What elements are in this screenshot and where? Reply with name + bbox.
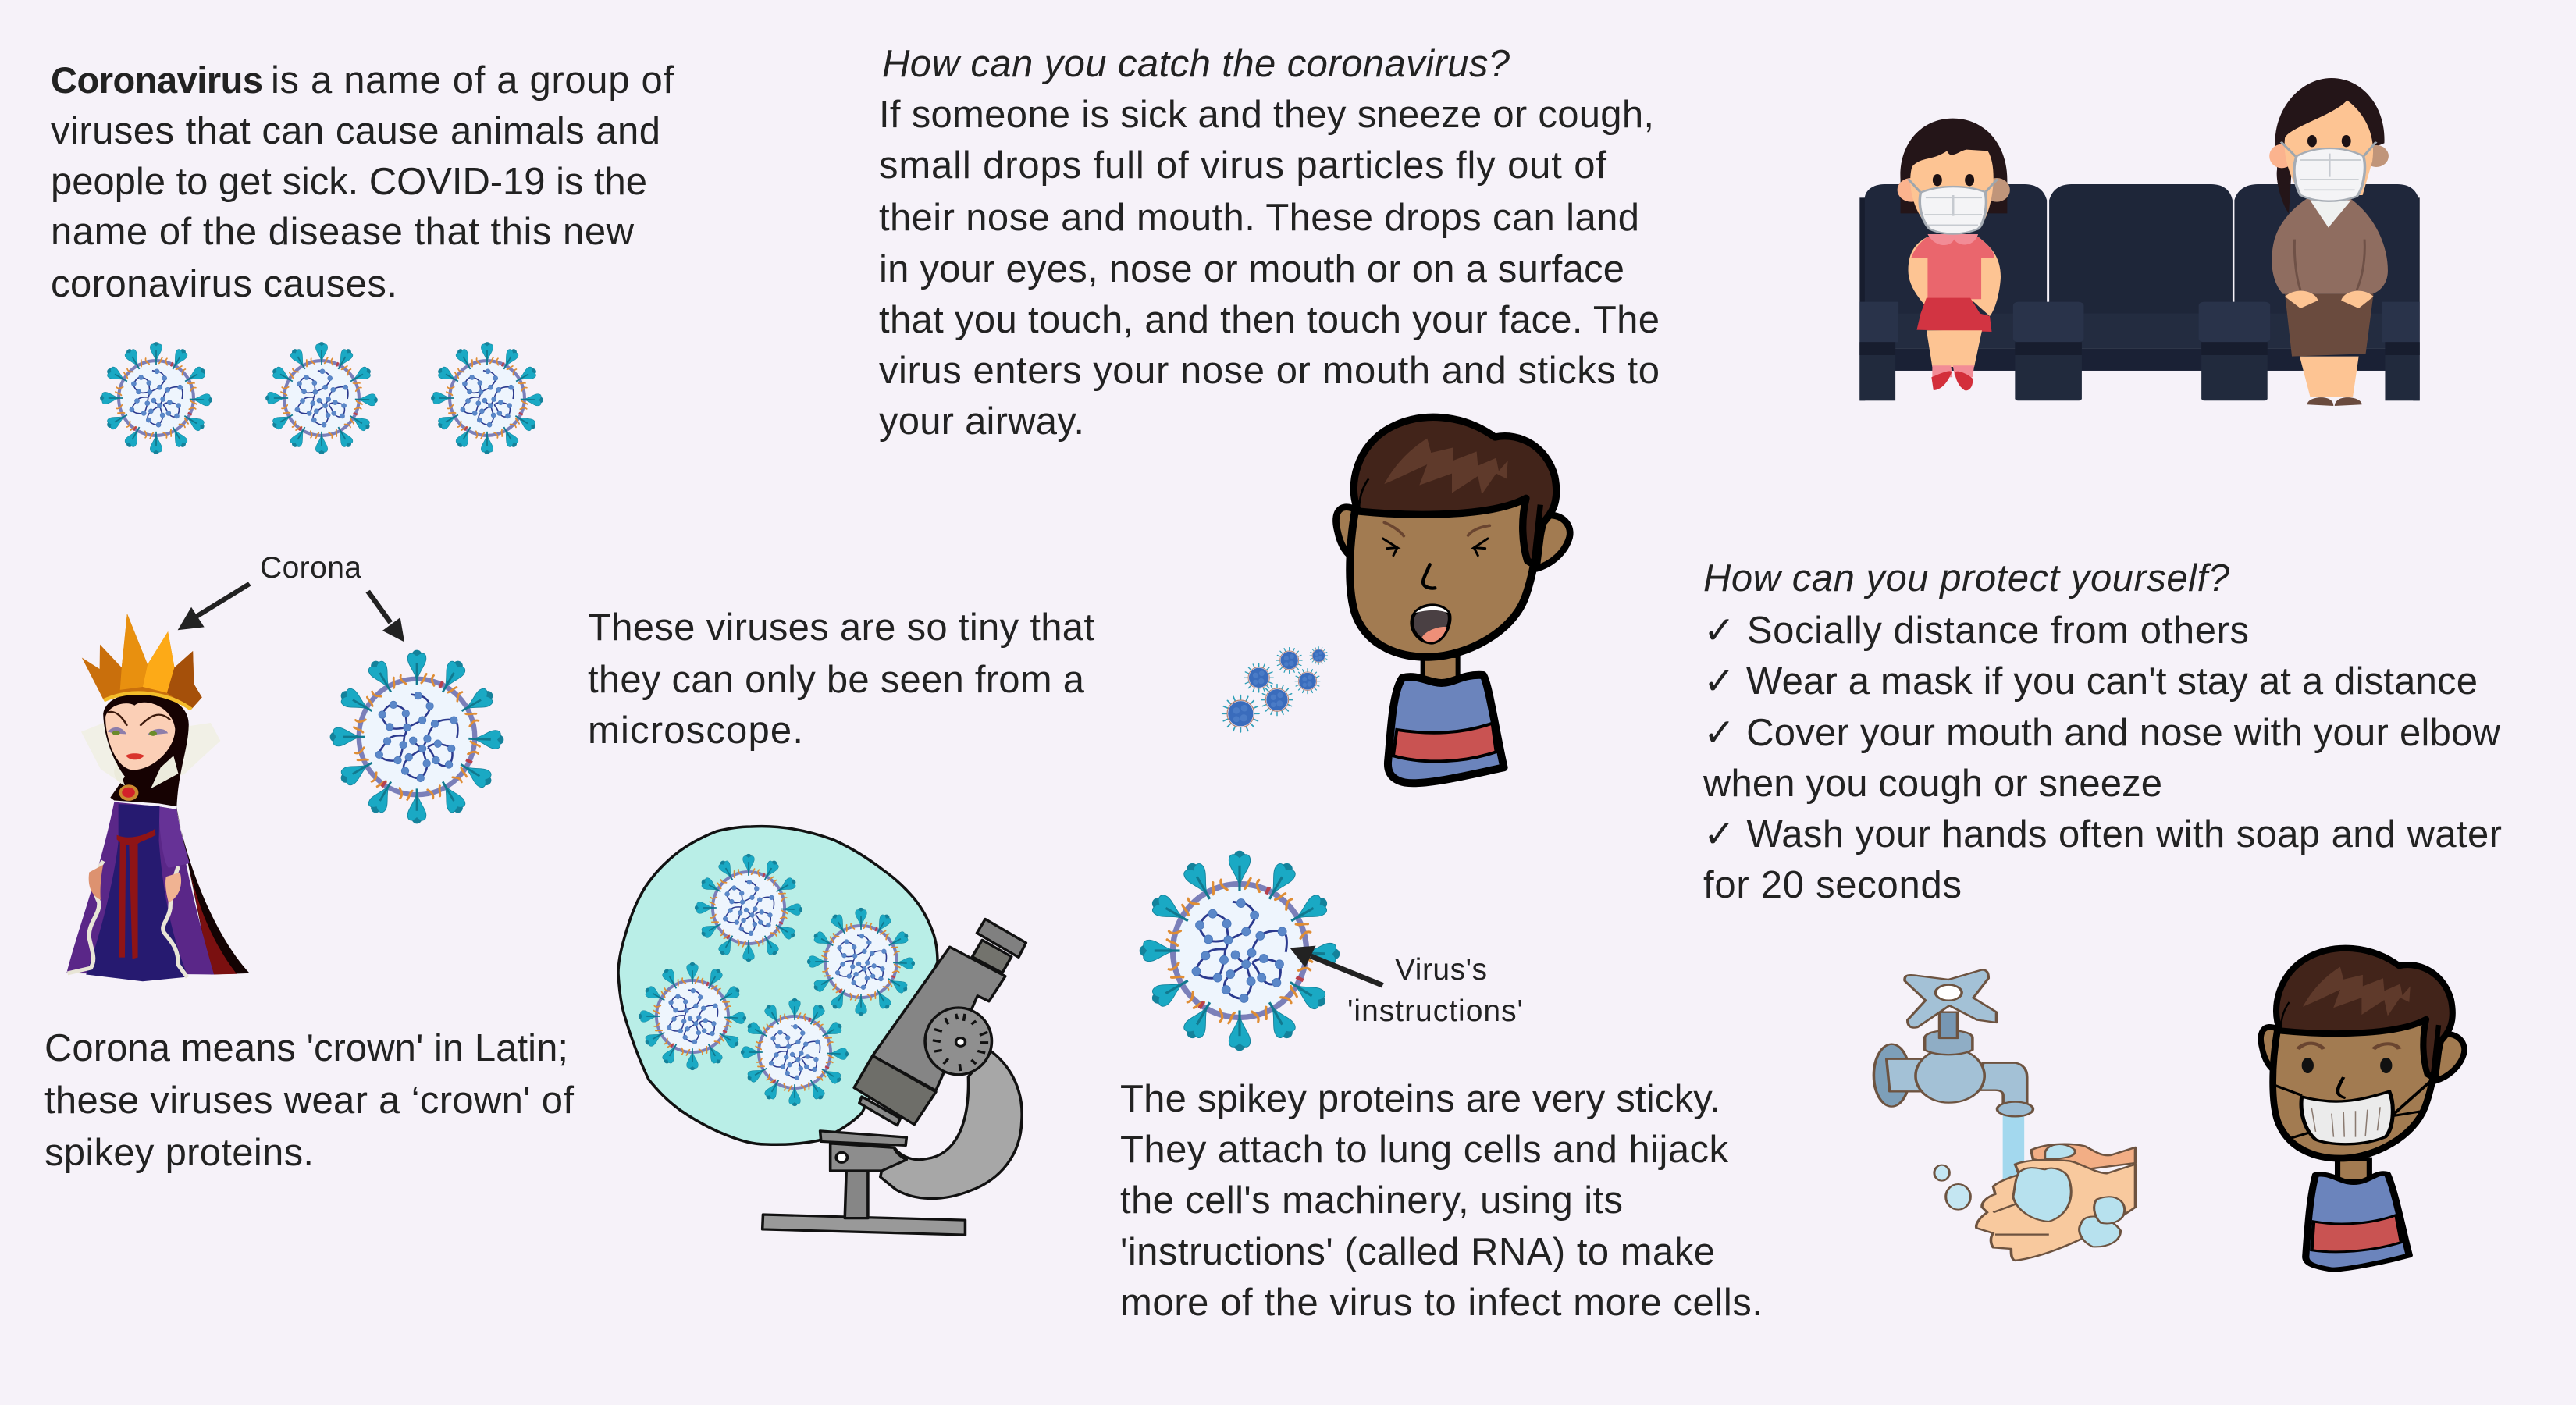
arrow: corona to queen's crown bbox=[178, 584, 250, 630]
text block: how can you catch the coronavirus: How can you catch the coronavirus? bbox=[882, 43, 1510, 85]
sofa bbox=[1859, 184, 2420, 400]
label: virus's instructions: Virus's bbox=[1395, 953, 1487, 987]
text block: how can you catch the coronavirus: your airway. bbox=[879, 400, 1084, 443]
text block: how can you catch the coronavirus bbox=[879, 43, 1660, 443]
face features bbox=[2298, 1044, 2400, 1049]
text block: how can you catch the coronavirus: their nose and mouth. These drops can land bbox=[879, 197, 1639, 239]
text block: how can you catch the coronavirus: that you touch, and then touch your face. The bbox=[879, 299, 1660, 341]
illustration: boy wearing a mask bbox=[2261, 948, 2464, 1270]
text block: how to protect yourself: ✓ Wash your hands often with soap and water bbox=[1703, 813, 2502, 855]
text block: coronavirus definition: coronavirus causes. bbox=[51, 263, 397, 305]
text block: how to protect yourself: ✓ Socially distance from others bbox=[1703, 610, 2249, 652]
mask bbox=[2274, 1077, 2435, 1140]
gown bbox=[86, 804, 188, 981]
shirt stripe bbox=[1393, 724, 1496, 761]
text block: corona means crown bbox=[44, 1027, 574, 1174]
text block: how to protect yourself: ✓ Wear a mask if you can't stay at a distance bbox=[1703, 660, 2478, 702]
soap bubbles bbox=[1934, 1165, 1970, 1210]
text block: how can you catch the coronavirus: small drops full of virus particles fly out of bbox=[879, 144, 1606, 187]
text block: spikey proteins: They attach to lung cells and hijack bbox=[1120, 1129, 1728, 1171]
illustration: boy sneezing bbox=[1336, 417, 1570, 783]
text block: corona means crown: spikey proteins. bbox=[44, 1132, 314, 1174]
text block: tiny viruses: microscope. bbox=[588, 710, 803, 752]
text block: spikey proteins: more of the virus to infect more cells. bbox=[1120, 1282, 1763, 1324]
text block: coronavirus definition: name of the disease that this new bbox=[51, 211, 635, 253]
text block: how can you catch the coronavirus: in your eyes, nose or mouth or on a surface bbox=[879, 248, 1624, 290]
text block: how to protect yourself: when you cough or sneeze bbox=[1703, 763, 2162, 805]
text block: how to protect yourself: ✓ Cover your mouth and nose with your elbow bbox=[1703, 712, 2501, 754]
illustration: people distancing on a sofa bbox=[1859, 78, 2420, 406]
text block: spikey proteins bbox=[1120, 1078, 1763, 1324]
neck bbox=[1423, 656, 1458, 685]
shirt bbox=[1388, 675, 1504, 783]
cuffs bbox=[68, 861, 187, 977]
text block: coronavirus definition: Coronavirus bbox=[51, 59, 263, 101]
text block: coronavirus definition: viruses that can cause animals and bbox=[51, 110, 660, 152]
robe sleeves bbox=[66, 802, 214, 974]
shirt stripe bbox=[2311, 1215, 2401, 1252]
crown bbox=[82, 614, 202, 710]
arrow: instructions pointer bbox=[1290, 946, 1382, 985]
label: virus's instructions bbox=[1347, 953, 1523, 1028]
text block: how to protect yourself: How can you protect yourself? bbox=[1703, 557, 2230, 599]
text block: coronavirus definition: is a name of a group of bbox=[271, 59, 674, 101]
illustration: evil queen with crown bbox=[66, 614, 250, 981]
face features bbox=[1383, 522, 1489, 589]
text block: how can you catch the coronavirus: If someone is sick and they sneeze or cough, bbox=[879, 94, 1654, 136]
label: virus's instructions: 'instructions' bbox=[1347, 994, 1523, 1028]
icon: virus with instructions bbox=[1140, 851, 1340, 1051]
cape back bbox=[175, 801, 250, 974]
text block: coronavirus definition bbox=[51, 59, 674, 305]
text block: tiny viruses bbox=[588, 606, 1094, 752]
label: Corona: Corona bbox=[260, 551, 361, 585]
person: girl with mask bbox=[1898, 119, 2010, 390]
illustration: tap and washing hands bbox=[1873, 970, 2135, 1261]
person: woman with mask bbox=[2269, 78, 2389, 406]
tap bbox=[1873, 970, 2033, 1116]
icon: large virus bbox=[330, 650, 504, 823]
text block: spikey proteins: The spikey proteins are very sticky. bbox=[1120, 1078, 1720, 1120]
icon: three viruses bbox=[100, 342, 543, 454]
collar front bbox=[114, 756, 178, 788]
hands bbox=[89, 865, 103, 900]
soap suds bbox=[2013, 1144, 2125, 1247]
shirt bbox=[2306, 1173, 2409, 1270]
text block: tiny viruses: These viruses are so tiny that bbox=[588, 606, 1094, 649]
text block: corona means crown: these viruses wear a ‘crown' of bbox=[44, 1080, 574, 1122]
text block: coronavirus definition: people to get sick. COVID-19 is the bbox=[51, 161, 647, 203]
neck bbox=[2338, 1159, 2369, 1181]
hood bbox=[103, 694, 189, 806]
text block: how to protect yourself: for 20 seconds bbox=[1703, 864, 1962, 906]
text block: how can you catch the coronavirus: virus enters your nose or mouth and sticks to bbox=[879, 350, 1660, 392]
illustration: microscope with viruses bbox=[618, 827, 1026, 1235]
text block: how to protect yourself bbox=[1703, 557, 2502, 906]
text block: spikey proteins: the cell's machinery, using its bbox=[1120, 1179, 1623, 1222]
text block: spikey proteins: 'instructions' (called RNA) to make bbox=[1120, 1231, 1715, 1273]
text block: corona means crown: Corona means 'crown' in Latin; bbox=[44, 1027, 568, 1069]
icon: sneezed virus particles bbox=[1222, 647, 1328, 732]
hands bbox=[1976, 1144, 2135, 1261]
collar bbox=[81, 723, 220, 788]
text block: tiny viruses: they can only be seen from a bbox=[588, 659, 1085, 701]
arrow: corona to virus bbox=[368, 591, 404, 642]
magnified view blob bbox=[618, 827, 938, 1144]
sash bbox=[117, 829, 155, 959]
face bbox=[105, 702, 175, 770]
brooch bbox=[119, 784, 138, 801]
water stream bbox=[2003, 1115, 2024, 1180]
